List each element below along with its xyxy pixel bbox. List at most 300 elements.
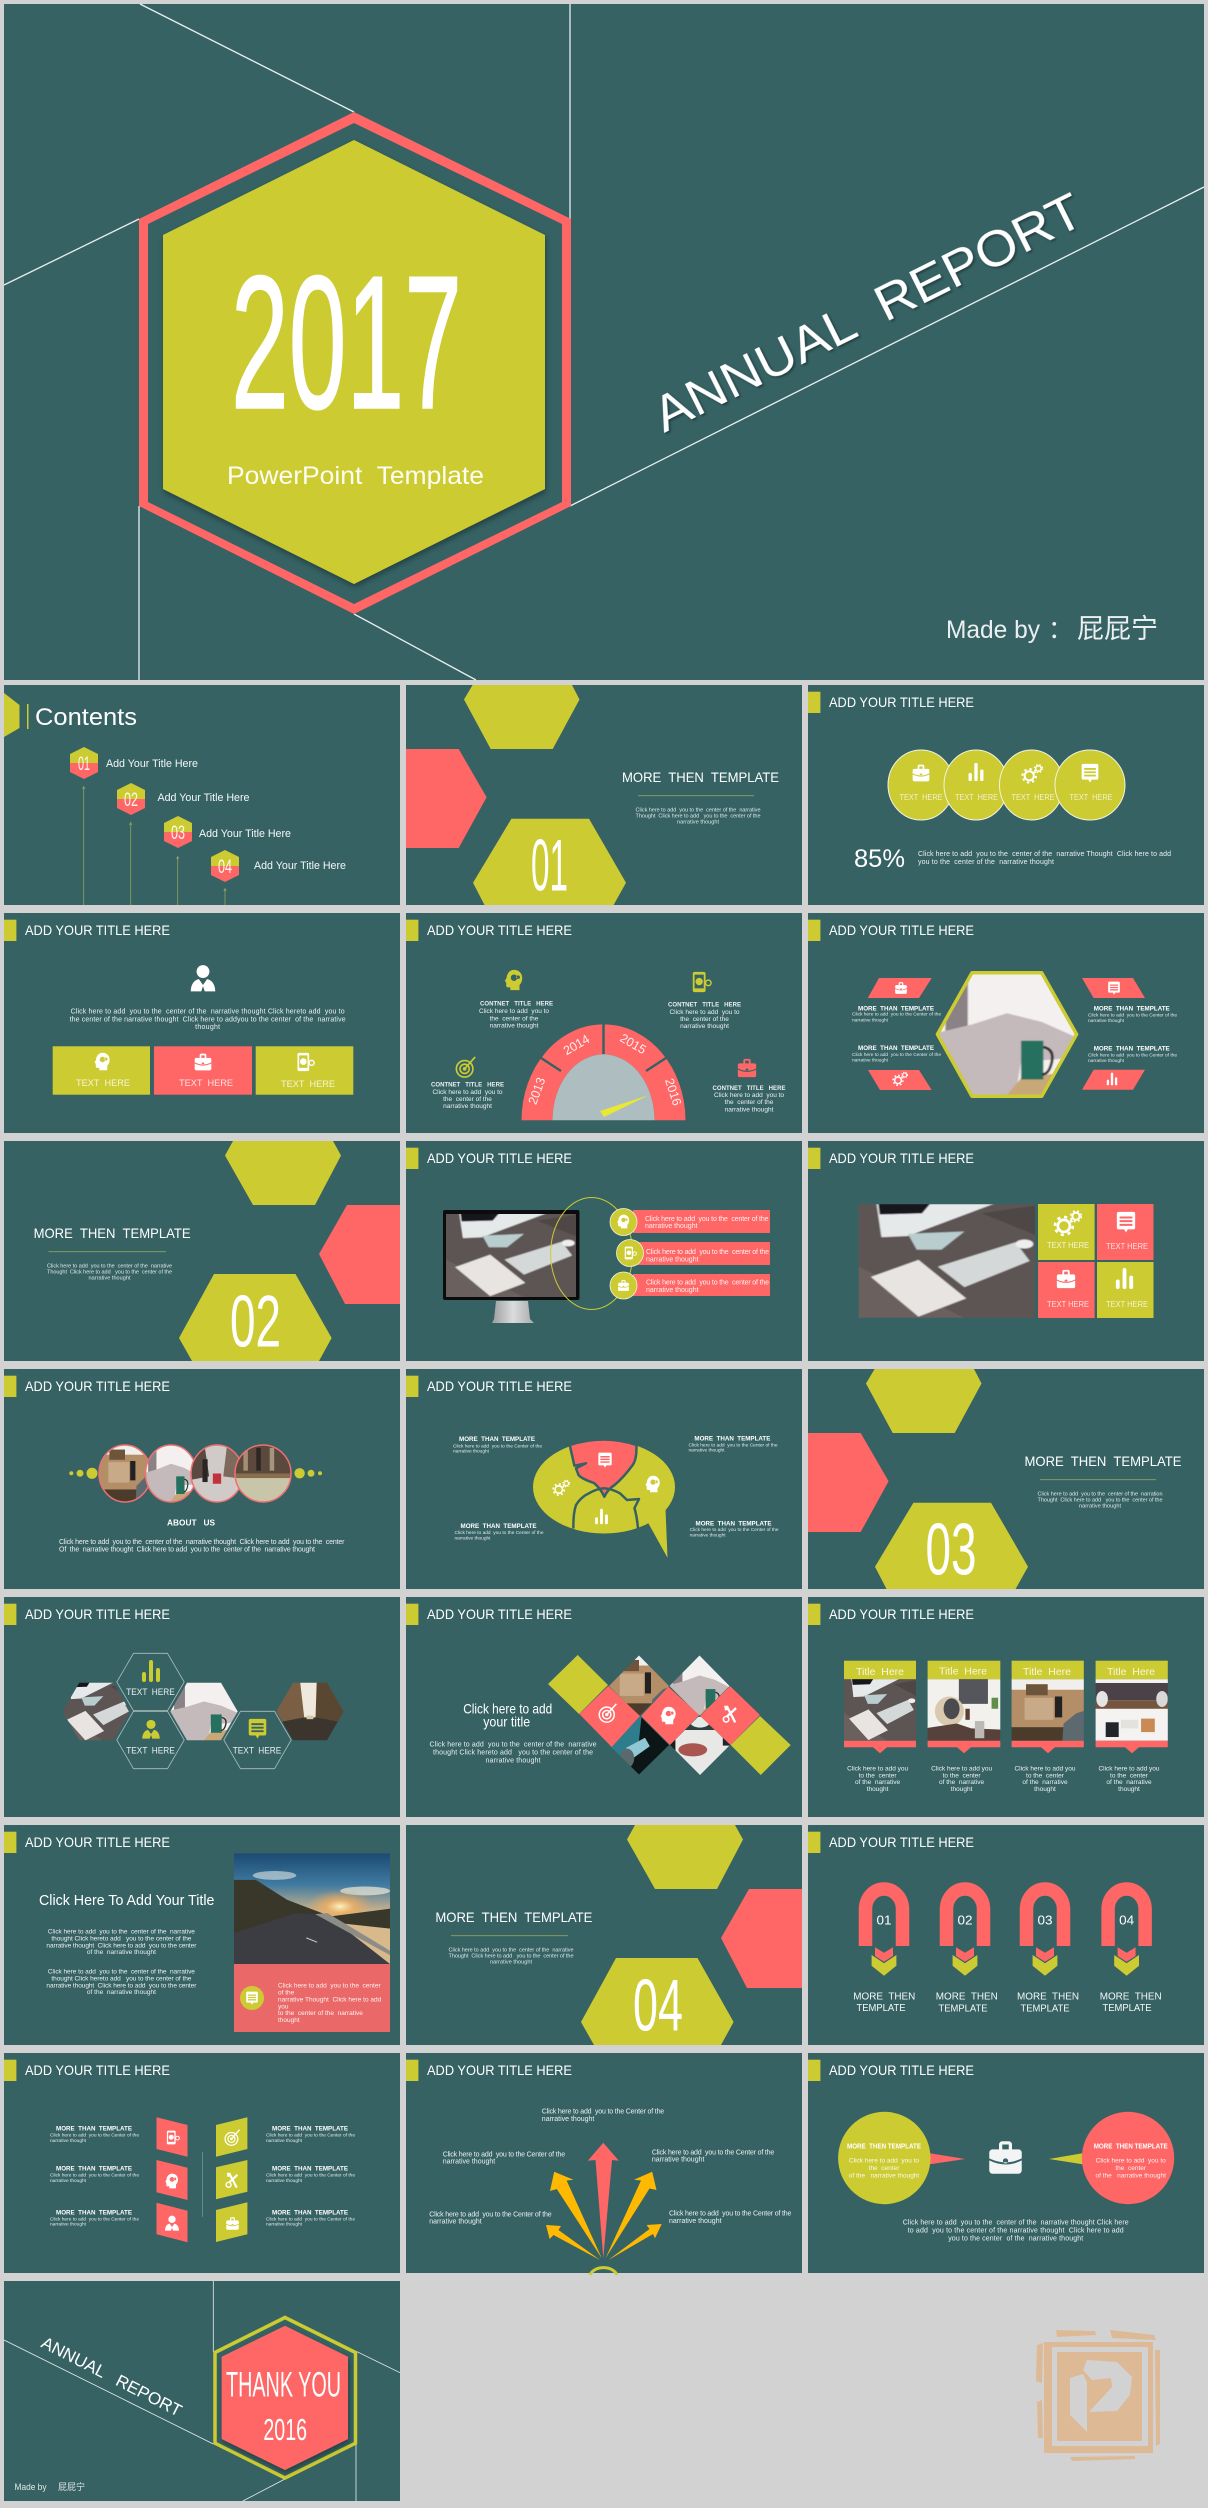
pointer lime xyxy=(1049,2153,1082,2164)
section description: Click here to add you to the center of the narrative xyxy=(448,1948,574,1954)
text top left xyxy=(852,1005,941,1023)
lime circle: Click here to add you to xyxy=(849,2158,919,2165)
item 01 label: Add Your Title Here xyxy=(106,758,198,770)
slide: section 01 xyxy=(406,685,802,907)
title: ADD YOUR TITLE HERE xyxy=(829,1834,974,1850)
coral diamond wrench xyxy=(700,1686,760,1745)
text block: top right: the center of the xyxy=(680,1016,729,1023)
section description xyxy=(448,1948,574,1966)
author credit: Made by xyxy=(946,616,1040,644)
title: ADD YOUR TITLE HERE xyxy=(427,1150,572,1166)
title: ADD YOUR TITLE HERE xyxy=(25,1834,170,1850)
slide: person and three boxes xyxy=(4,913,400,1133)
text block: bottom right: Click here to add you to xyxy=(714,1092,784,1099)
coral circle: MORE THEN TEMPLATE xyxy=(1094,2144,1168,2151)
coral circle xyxy=(1082,2112,1174,2204)
author credit: 屁屁宁 xyxy=(1077,614,1158,644)
contents hex tab xyxy=(4,693,20,737)
tile: person xyxy=(156,2203,188,2242)
outline hexagon 1: TEXT HERE xyxy=(126,1687,175,1698)
circle 3: TEXT HERE xyxy=(1012,793,1054,802)
row 1: Click here to add you to the center of the xyxy=(645,1216,769,1223)
item 04: 04 xyxy=(218,857,232,878)
tag top right xyxy=(1082,978,1145,998)
tile: bars xyxy=(1097,1262,1154,1318)
speech bubble chart xyxy=(533,1440,675,1558)
percentage: 85% xyxy=(854,845,905,873)
icon: briefcase xyxy=(738,1059,756,1077)
paragraph 1: of the narrative thought xyxy=(87,1949,156,1956)
description: Click here to add you to the center of the narrative thought Click here xyxy=(903,2220,1129,2227)
section number: 03 xyxy=(926,1510,976,1591)
title: ADD YOUR TITLE HERE xyxy=(25,1378,170,1394)
card 3 xyxy=(1008,1661,1087,1793)
text left upper: narrative thought xyxy=(443,2159,495,2166)
card 2 xyxy=(924,1661,1004,1793)
text block: top left: Click here to add you to xyxy=(479,1008,549,1015)
cover decorative lines xyxy=(4,4,1204,680)
text right upper xyxy=(652,2149,774,2164)
text right lower: narrative thought xyxy=(669,2218,722,2225)
item 01: 01 xyxy=(78,754,90,775)
icon: briefcase xyxy=(989,2141,1022,2174)
text block: bottom left xyxy=(431,1082,505,1110)
text right 1: Click here to add you to the Center of the xyxy=(266,2133,355,2139)
circle 2: TEXT HERE xyxy=(955,793,998,802)
description xyxy=(918,851,1171,866)
text top right: Click here to add you to the Center of the xyxy=(688,1443,778,1449)
tag top left xyxy=(868,978,932,998)
coral panel: Click here to add you to the center xyxy=(278,1983,381,1990)
text block: bottom right: the center of the xyxy=(725,1099,774,1106)
title bar xyxy=(808,920,820,941)
slide: hexagon grid xyxy=(4,1597,400,1817)
author credit: Made by xyxy=(14,2482,47,2492)
card 3: Click here to add you xyxy=(1014,1765,1076,1772)
subtitle: PowerPoint Template xyxy=(227,462,484,490)
text left lower xyxy=(429,2211,552,2226)
slide: section 02 xyxy=(4,1141,400,1363)
text block: bottom right xyxy=(712,1085,786,1114)
thank you text: THANK YOU xyxy=(226,2366,341,2405)
description: Click here to add you to the center of the narrative Thought Click here to add xyxy=(918,851,1171,858)
description: Click here to add you to the center of the narrative thought Click hereto add you to xyxy=(71,1009,345,1016)
photo ellipses xyxy=(96,1442,294,1507)
row 1 xyxy=(610,1208,770,1236)
card 1 xyxy=(840,1661,920,1793)
circle 3 xyxy=(1000,750,1064,820)
desk photo xyxy=(850,1199,1044,1323)
text top right: MORE THAN TEMPLATE xyxy=(1094,1005,1170,1012)
coral diamond head xyxy=(641,1687,699,1745)
title bar xyxy=(406,1604,418,1625)
text block: bottom left: CONTNET TITLE HERE xyxy=(431,1082,505,1089)
decorative lines xyxy=(4,2281,400,2501)
arrow fan xyxy=(546,2143,662,2260)
coral panel: narrative Thought Click here to add xyxy=(278,1996,382,2003)
lime circle: of the narrative thought xyxy=(849,2172,919,2179)
section description: Thought Click here to add you to the center of the xyxy=(448,1954,574,1960)
text top right: narrative thought xyxy=(1088,1018,1125,1024)
coral panel: to the center of the narrative xyxy=(278,2010,363,2017)
card 1: Click here to add you xyxy=(847,1765,909,1772)
label 04: TEMPLATE xyxy=(1102,2002,1152,2014)
slide: four circles xyxy=(808,685,1204,905)
text right 2: narrative thought xyxy=(266,2178,303,2184)
title: ADD YOUR TITLE HERE xyxy=(25,922,170,938)
description xyxy=(903,2220,1129,2243)
gauge chart: 2015 xyxy=(617,1031,649,1057)
slide: cover xyxy=(4,4,1204,680)
circle 4: TEXT HERE xyxy=(1070,793,1112,802)
tile: phone xyxy=(156,2117,188,2157)
row 2: Click here to add you to the center of the xyxy=(646,1249,769,1256)
description: to add you to the center of the narrative thought Click here to add xyxy=(908,2228,1124,2235)
text block: top right xyxy=(668,1001,742,1030)
text top left: MORE THAN TEMPLATE xyxy=(858,1005,934,1012)
text left 1: Click here to add you to the Center of the xyxy=(50,2133,139,2139)
text left 2: MORE THAN TEMPLATE xyxy=(56,2166,132,2173)
road photo xyxy=(234,1853,390,1964)
description: Click here to add you to the center of the narrative xyxy=(430,1742,597,1749)
card 1: Title Here xyxy=(856,1667,904,1678)
title bar xyxy=(4,1604,16,1625)
text left upper: Click here to add you to the Center of the xyxy=(443,2151,565,2158)
box 3: TEXT HERE xyxy=(281,1079,335,1090)
author credit: ： xyxy=(1048,616,1073,644)
item 04 label: Add Your Title Here xyxy=(254,860,346,872)
card 2: Title Here xyxy=(939,1666,987,1678)
item 04 xyxy=(211,850,239,882)
description: narrative thought xyxy=(486,1757,541,1764)
text top left: Click here to add you to the Center of the xyxy=(453,1443,542,1449)
title bar xyxy=(4,1376,16,1397)
coral hexagon xyxy=(222,2326,348,2470)
tile: briefcase xyxy=(1038,1262,1095,1318)
text bottom left: narrative thought xyxy=(852,1057,889,1063)
card 1: thought xyxy=(867,1786,889,1793)
label 01: TEMPLATE xyxy=(856,2002,906,2014)
text top right: MORE THAN TEMPLATE xyxy=(694,1436,770,1443)
description: thought xyxy=(195,1024,220,1031)
top lime hexagon xyxy=(225,1141,341,1205)
slide: four cards xyxy=(808,1597,1204,1817)
outline hexagon 3 xyxy=(224,1711,291,1769)
author credit: 屁屁宁 xyxy=(58,2481,85,2492)
lower lime hexagon xyxy=(875,1503,1028,1589)
text bottom right: Click here to add you to the Center of the xyxy=(690,1527,779,1533)
slide: section 03 xyxy=(808,1369,1204,1591)
outline hexagon 1 xyxy=(117,1653,184,1711)
photo hexagon A xyxy=(62,1682,130,1740)
item 03 label: Add Your Title Here xyxy=(199,828,291,840)
coral circle: the center xyxy=(1115,2165,1147,2172)
lime diamond bottom right xyxy=(731,1716,791,1775)
card 2: of the narrative xyxy=(939,1779,985,1786)
text bottom right: MORE THAN TEMPLATE xyxy=(696,1520,772,1527)
monitor xyxy=(440,1210,582,1323)
row 1: narrative thought xyxy=(645,1223,698,1230)
slide: arrows xyxy=(406,2053,802,2275)
row 3: Click here to add you to the center of the xyxy=(646,1280,769,1287)
description: you to the center of the narrative thought xyxy=(918,859,1054,866)
gauge chart: 2013 xyxy=(526,1075,548,1106)
title bar xyxy=(406,1148,418,1169)
lime circle: MORE THEN TEMPLATE xyxy=(847,2144,921,2151)
text right 2: Click here to add you to the Center of the xyxy=(266,2173,355,2179)
section description xyxy=(1038,1492,1162,1510)
box 1: TEXT HERE xyxy=(76,1078,130,1089)
text left 3: narrative thought xyxy=(50,2222,87,2228)
text bottom left xyxy=(852,1045,941,1063)
section number: 04 xyxy=(633,1966,683,2047)
tile: head xyxy=(156,2160,188,2200)
label 03: MORE THEN xyxy=(1017,1991,1079,2003)
text block: bottom left: Click here to add you to xyxy=(432,1089,503,1096)
paragraph 1: Click here to add you to the center of the narrative xyxy=(48,1929,195,1936)
coral circle: of the narrative thought xyxy=(1095,2172,1166,2179)
description xyxy=(59,1539,345,1554)
slide: speech bubble xyxy=(406,1369,802,1589)
slide: monitor xyxy=(406,1141,802,1361)
text top right: Click here to add you to the Center of the xyxy=(1088,1012,1177,1018)
text left 2 xyxy=(50,2166,139,2184)
section title: MORE THEN TEMPLATE xyxy=(435,1909,592,1925)
dots left xyxy=(69,1468,98,1479)
outline hexagon 3: TEXT HERE xyxy=(233,1746,281,1757)
coral panel xyxy=(234,1964,390,2032)
text bottom left: Click here to add you to the Center of the xyxy=(454,1530,544,1536)
arch 02: 02 xyxy=(958,1912,972,1927)
text top left xyxy=(453,1436,542,1454)
item 01 xyxy=(70,747,98,779)
slide: contents xyxy=(4,685,400,905)
text right 2 xyxy=(266,2166,355,2184)
slide: section 01: 01 xyxy=(531,826,568,907)
circle 2 xyxy=(944,750,1008,820)
arch 03 xyxy=(1026,1889,1064,1976)
coral panel: you xyxy=(278,2003,289,2010)
gauge chart: 2016 xyxy=(662,1077,684,1107)
section description xyxy=(636,808,760,826)
arch 02 xyxy=(946,1889,984,1976)
title bar xyxy=(4,2060,16,2081)
card 2: Click here to add you xyxy=(931,1765,993,1772)
text block: top left xyxy=(479,1001,554,1029)
paragraph 1 xyxy=(46,1929,197,1956)
label 03 xyxy=(1017,1991,1079,2014)
circle 1: TEXT HERE xyxy=(900,793,942,802)
text right 3: Click here to add you to the Center of the xyxy=(266,2216,355,2222)
text right 3: MORE THAN TEMPLATE xyxy=(272,2209,348,2216)
photo hexagon B xyxy=(170,1682,238,1740)
slide: six tiles xyxy=(4,2053,400,2273)
title bar xyxy=(406,1376,418,1397)
section description xyxy=(47,1264,172,1282)
title bar xyxy=(808,1148,820,1169)
section title: MORE THEN TEMPLATE xyxy=(622,769,779,785)
description: the center of the narrative thought Click here to addyou to the center of the narrative xyxy=(70,1016,346,1023)
slide: hexagon photo xyxy=(808,913,1204,1133)
section description: Click here to add you to the center of the narrative xyxy=(636,808,760,814)
text bottom right xyxy=(1088,1046,1177,1064)
paragraph 2: Click here to add you to the center of the narrative xyxy=(48,1969,195,1976)
item 03: 03 xyxy=(171,823,185,844)
description xyxy=(430,1742,597,1764)
arch 03: 03 xyxy=(1038,1912,1052,1927)
row 3 xyxy=(610,1272,770,1299)
card 3: of the narrative xyxy=(1022,1779,1068,1786)
text bottom right: Click here to add you to the Center of the xyxy=(1088,1053,1177,1059)
card 4 xyxy=(1092,1661,1171,1793)
icon: phone xyxy=(693,972,711,992)
title: ADD YOUR TITLE HERE xyxy=(829,1606,974,1622)
tile: gears xyxy=(1038,1204,1095,1260)
title bar xyxy=(406,2060,418,2081)
text block: top right: Click here to add you to xyxy=(669,1009,740,1016)
card 1: to the center xyxy=(859,1772,897,1779)
tile: wrench xyxy=(216,2160,247,2199)
coral hexagon frame xyxy=(139,112,571,614)
section number: 02 xyxy=(230,1282,281,1363)
text top xyxy=(542,2109,664,2123)
slide: road photo xyxy=(4,1825,400,2045)
lime circle: the center xyxy=(869,2165,900,2172)
text block: top right: narrative thought xyxy=(680,1023,729,1030)
dots right xyxy=(294,1468,322,1478)
text right upper: narrative thought xyxy=(652,2157,704,2164)
item 02 xyxy=(117,783,145,815)
hexagon photo xyxy=(936,971,1078,1098)
text top: narrative thought xyxy=(542,2116,594,2123)
top lime hexagon xyxy=(464,685,580,749)
text left lower: narrative thought xyxy=(429,2219,482,2226)
arch 01: 01 xyxy=(876,1912,892,1927)
item 02: 02 xyxy=(124,790,138,811)
text block: top left: the center of the xyxy=(490,1015,539,1022)
section description: Click here to add you to the center of the narrative xyxy=(47,1264,172,1270)
text right 1: MORE THAN TEMPLATE xyxy=(272,2126,348,2133)
text left lower: Click here to add you to the Center of the xyxy=(429,2211,552,2218)
icon: head xyxy=(505,970,522,990)
box 3 xyxy=(256,1046,353,1095)
section description: narrative thought xyxy=(1079,1504,1121,1510)
pointer coral xyxy=(930,2153,965,2164)
lime hexagon xyxy=(163,140,545,584)
label 01 xyxy=(853,1990,915,2014)
circle 4 xyxy=(1055,750,1125,820)
text bottom left: MORE THAN TEMPLATE xyxy=(858,1045,934,1052)
title: ADD YOUR TITLE HERE xyxy=(829,694,974,710)
description: Click here to add you to the center of the narrative thought Click here to add you to the center xyxy=(59,1539,345,1546)
tile: chat: TEXT HERE xyxy=(1106,1241,1148,1251)
lime hexagon frame xyxy=(215,2318,356,2478)
text left 2: narrative thought xyxy=(50,2178,87,2184)
text bottom right xyxy=(690,1520,779,1538)
text bottom left xyxy=(454,1523,544,1541)
coral diamond target xyxy=(579,1686,640,1747)
tile: bars: TEXT HERE xyxy=(1106,1299,1148,1309)
coral panel: thought xyxy=(278,2017,300,2024)
text top left: narrative thought xyxy=(852,1017,889,1023)
top lime hexagon xyxy=(627,1825,743,1889)
heading xyxy=(463,1700,552,1730)
label 01: MORE THEN xyxy=(853,1990,915,2002)
title bar xyxy=(808,1832,820,1853)
card 4: of the narrative xyxy=(1106,1779,1152,1786)
lower lime hexagon xyxy=(581,1958,734,2045)
text left 3: MORE THAN TEMPLATE xyxy=(56,2209,132,2216)
coral hexagon xyxy=(319,1205,400,1304)
paragraph 2: thought Click hereto add you to the center of the xyxy=(51,1976,192,1983)
year 2016: 2016 xyxy=(263,2412,307,2447)
section title: MORE THEN TEMPLATE xyxy=(1024,1453,1182,1469)
tag bottom right xyxy=(1082,1070,1145,1090)
icon: person xyxy=(191,965,215,991)
photo hexagon C xyxy=(276,1682,344,1740)
text block: bottom right: CONTNET TITLE HERE xyxy=(712,1085,786,1092)
description xyxy=(70,1009,346,1031)
item 03 xyxy=(164,816,192,848)
text left upper xyxy=(443,2151,565,2166)
section description: Thought Click here to add you to the center of the xyxy=(1038,1498,1162,1504)
coral hexagon xyxy=(808,1433,889,1532)
text bottom left: narrative thought xyxy=(454,1535,491,1541)
tile: briefcase: TEXT HERE xyxy=(1047,1299,1089,1309)
about heading: ABOUT US xyxy=(167,1518,215,1528)
paragraph 2 xyxy=(46,1969,197,1996)
lime circle xyxy=(838,2112,930,2204)
card 4: Click here to add you xyxy=(1098,1765,1160,1772)
card 3: thought xyxy=(1034,1786,1056,1793)
section title: MORE THEN TEMPLATE xyxy=(34,1225,191,1241)
text top left: narrative thought xyxy=(453,1448,490,1454)
text block: bottom left: the center of the xyxy=(443,1096,492,1103)
text left 1: MORE THAN TEMPLATE xyxy=(56,2126,132,2133)
paragraph 2: of the narrative thought xyxy=(87,1989,156,1996)
text right upper: Click here to add you to the Center of the xyxy=(652,2149,774,2156)
text bottom right: narrative thought xyxy=(1088,1058,1125,1064)
lower lime hexagon xyxy=(179,1274,332,1361)
outline ellipse xyxy=(551,1198,633,1310)
label 03: TEMPLATE xyxy=(1020,2002,1070,2014)
arch 04: 04 xyxy=(1119,1912,1134,1927)
description: thought Click hereto add you to the center of the xyxy=(433,1750,593,1757)
paragraph 1: thought Click hereto add you to the center of the xyxy=(51,1936,192,1943)
text right lower xyxy=(669,2211,791,2225)
tile: target xyxy=(216,2117,247,2157)
arch 04 xyxy=(1108,1889,1145,1976)
title: ADD YOUR TITLE HERE xyxy=(25,2062,170,2078)
label 02: TEMPLATE xyxy=(938,2002,988,2014)
row 2 xyxy=(616,1240,770,1266)
label 02 xyxy=(936,1991,998,2014)
section description: narrative thought xyxy=(677,820,719,826)
coral hexagon xyxy=(721,1889,802,1988)
annual report heading: ANNUAL REPORT xyxy=(38,2333,185,2420)
row 3: narrative thought xyxy=(646,1287,699,1294)
slide: thank you xyxy=(4,2281,400,2501)
text top: Click here to add you to the Center of the xyxy=(542,2109,664,2116)
coral panel: of the xyxy=(278,1990,295,1997)
text right 3: narrative thought xyxy=(266,2222,303,2228)
box 1 xyxy=(53,1046,150,1095)
card 4: thought xyxy=(1118,1786,1140,1793)
section description: narrative thought xyxy=(490,1960,532,1966)
text bottom right: narrative thought xyxy=(690,1532,726,1538)
tag bottom left xyxy=(868,1070,932,1090)
label 02: MORE THEN xyxy=(936,1991,998,2003)
